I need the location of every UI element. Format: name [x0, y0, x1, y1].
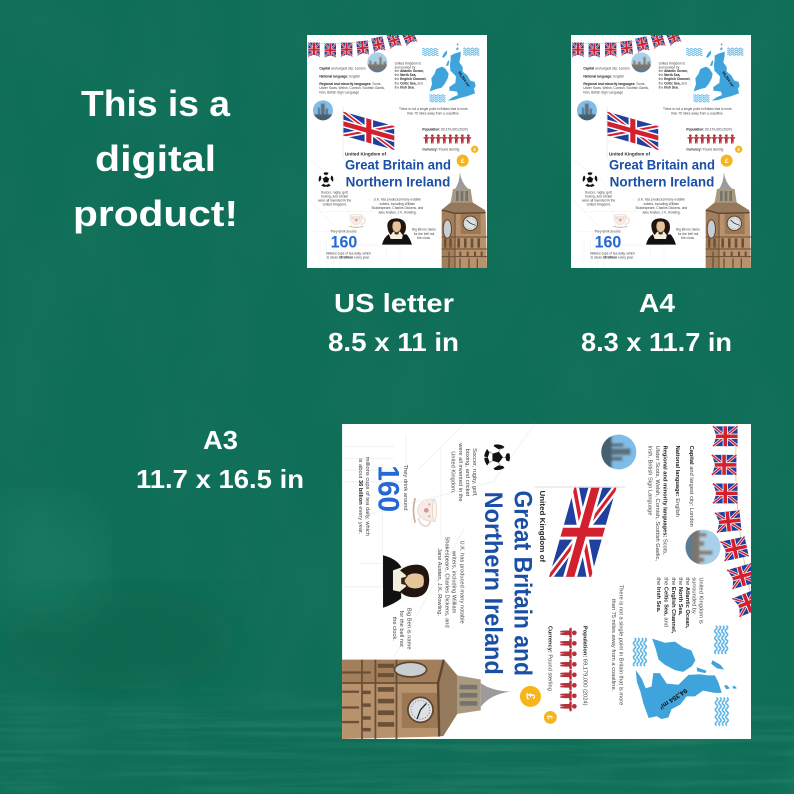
stat: tea	[357, 457, 408, 536]
map of the UK: 94,354 mi²	[721, 71, 735, 89]
illustration: Big Ben	[706, 172, 751, 268]
text: capital and languages: Capital and largest city: London	[319, 67, 366, 71]
text: Big Ben fact	[412, 228, 436, 240]
stat: tea: millions cups of tea daily, which	[364, 457, 370, 536]
map of the UK	[633, 626, 737, 726]
label: US letter size	[328, 288, 459, 357]
text: Big Ben fact: Big Ben is name	[406, 608, 412, 650]
heading: this is a digital product: digital	[95, 138, 216, 179]
text: Big Ben fact: the clock.	[681, 236, 695, 240]
text: Big Ben fact: Big Ben is name	[412, 228, 436, 232]
text: sports	[449, 442, 477, 502]
text: capital and languages	[583, 67, 649, 94]
coins: £	[737, 147, 740, 152]
text: sports: United Kingdom.	[449, 451, 455, 494]
label: US letter size: 8.5 x 11 in	[328, 327, 459, 357]
text: capital and languages: Irish, British Sign Language	[583, 90, 623, 94]
text: capital and languages: Capital and largest city: London	[688, 446, 694, 527]
panel: A4 preview	[571, 28, 751, 268]
text: coastline fact: than 75 miles away from a coastline.	[610, 599, 616, 692]
text: surrounding seas: United Kingdom is	[698, 577, 704, 624]
map of the UK: 94,354 mi²	[658, 687, 688, 710]
label: US letter size: US letter	[334, 288, 454, 318]
illustration: Big Ben	[442, 172, 487, 268]
text: writers: Shakespeare, Charles Dickens, and	[444, 537, 450, 628]
label: A4 size: A4	[639, 288, 676, 318]
union flag	[607, 107, 658, 158]
text: surrounding seas: United Kingdom is	[395, 61, 421, 65]
photo: skyline circle	[576, 99, 598, 121]
text: population and pictogram	[422, 127, 471, 144]
photo: skyline circle	[312, 99, 334, 121]
text: coastline fact: There is not a single point in Britain that is more	[663, 107, 732, 111]
text: surrounding seas	[659, 61, 691, 90]
illustration: Shakespeare	[646, 218, 676, 245]
map of the UK	[686, 43, 743, 102]
text: surrounding seas: the English Channel,	[659, 77, 691, 81]
text: writers: Shakespeare, Charles Dickens, and	[635, 206, 687, 210]
text: surrounding seas: surrounded by	[395, 65, 416, 69]
coins: £	[461, 158, 465, 165]
text: sports: Soccer, rugby, golf,	[585, 190, 613, 194]
text: population and pictogram	[686, 127, 735, 144]
page background	[307, 35, 487, 268]
text: writers: writers, including William	[380, 202, 415, 206]
label: A4 size: 8.3 x 11.7 in	[581, 327, 732, 357]
stat: tea: 160	[371, 465, 403, 512]
text: surrounding seas: the Celtic Sea, and	[662, 577, 668, 627]
text: currency: Currency: Pound sterling	[422, 147, 460, 151]
title: United Kingdom of	[538, 490, 547, 563]
title: Northern Ireland	[610, 174, 714, 190]
stat: tea	[590, 230, 635, 259]
illustration: Shakespeare	[383, 555, 429, 608]
text: writers: U.K. has produced many notable	[458, 540, 464, 624]
text: coastline fact	[610, 585, 623, 705]
text: surrounding seas: the English Channel,	[670, 577, 676, 634]
text: capital and languages	[647, 446, 694, 561]
text: capital and languages: Regional and minority languages: Scots,	[661, 446, 667, 555]
stat: tea: They drink around	[402, 465, 408, 511]
icon: tea cup	[349, 214, 365, 227]
text: sports	[582, 190, 615, 207]
text: capital and languages: National language: English	[674, 446, 680, 517]
photo: city circle	[366, 51, 389, 74]
coins: £	[545, 715, 554, 720]
text: sports: boxing, and cricket	[464, 449, 470, 497]
illustration: Shakespeare	[382, 218, 412, 245]
text: capital and languages: National language: English	[319, 75, 360, 79]
coins: £	[725, 158, 729, 165]
icon: football	[482, 442, 511, 472]
stat: tea: millions cups of tea daily, which	[590, 251, 635, 255]
chalkboard background	[0, 520, 794, 794]
text: Big Ben fact	[676, 228, 700, 240]
text: writers: U.K. has produced many notable	[374, 198, 421, 202]
map of the UK	[422, 43, 479, 102]
text: capital and languages: Irish, British Sign Language	[647, 446, 653, 515]
stat: tea: millions cups of tea daily, which	[326, 251, 371, 255]
bunting	[307, 28, 417, 57]
heading: this is a digital product: product!	[73, 193, 238, 234]
icon: tea cup	[613, 214, 629, 227]
title	[345, 151, 451, 190]
text: capital and languages: Ulster Scots, Welsh, Cornish, Scottish Gaelic,	[319, 86, 385, 90]
text: sports: boxing, and cricket	[321, 194, 348, 198]
label: A3 size: 11.7 x 16.5 in	[136, 464, 304, 494]
text: surrounding seas: surrounded by	[690, 577, 697, 614]
text: surrounding seas: the Atlantic Ocean,	[684, 577, 690, 629]
heading: this is a digital product: This is a	[81, 83, 231, 124]
text: sports: were all invented in the	[318, 198, 351, 202]
photo: skyline circle	[599, 433, 638, 471]
text: writers: Jane Austen, J.K. Rowling.	[378, 210, 417, 214]
title: Great Britain and	[609, 157, 715, 173]
text: surrounding seas: the North Sea,	[659, 73, 680, 77]
stat: tea: is about 36 billion every year.	[591, 255, 634, 259]
text: coastline fact: There is not a single point in Britain that is more	[399, 107, 468, 111]
text: coastline fact: than 75 miles away from a coastline.	[407, 111, 460, 115]
text: writers	[371, 198, 423, 214]
text: writers: Jane Austen, J.K. Rowling.	[436, 548, 442, 616]
text: capital and languages: Capital and largest city: London	[583, 67, 630, 71]
coins	[721, 146, 742, 167]
icon: football	[581, 172, 599, 188]
text: writers: U.K. has produced many notable	[638, 198, 685, 202]
photo: city circle	[630, 51, 653, 74]
text: writers: writers, including William	[451, 550, 457, 614]
text: surrounding seas: the North Sea,	[395, 73, 416, 77]
text: surrounding seas: the Atlantic Ocean,	[395, 69, 424, 73]
text: surrounding seas: the English Channel,	[395, 77, 427, 81]
map of the UK: 94,354 mi²	[457, 71, 471, 89]
text: Big Ben fact: for the bell not	[398, 611, 404, 647]
text: sports: boxing, and cricket	[585, 194, 612, 198]
bunting	[712, 424, 763, 617]
title: Great Britain and	[509, 490, 536, 676]
text: Big Ben fact	[391, 608, 412, 650]
stat: tea	[326, 230, 371, 259]
text: surrounding seas: United Kingdom is	[659, 61, 685, 65]
text: surrounding seas: the Irish Sea.	[659, 86, 679, 90]
text: population and pictogram: Population: 69,179,000 (2024)	[422, 127, 468, 131]
stat: tea: 160	[595, 232, 621, 251]
text: surrounding seas: the Irish Sea.	[395, 86, 415, 90]
panel: A3 preview rotated	[342, 424, 763, 739]
stat: tea: They drink around	[330, 230, 357, 234]
stat: tea: is about 36 billion every year.	[357, 458, 363, 535]
title: United Kingdom of	[609, 151, 651, 156]
text: surrounding seas	[395, 61, 427, 90]
text: capital and languages: National language: English	[583, 75, 624, 79]
heading: this is a digital product	[73, 83, 238, 234]
text: writers: writers, including William	[644, 202, 679, 206]
text: coastline fact	[399, 107, 468, 115]
text: sports: Soccer, rugby, golf,	[471, 448, 477, 497]
text: currency: Currency: Pound sterling	[686, 147, 724, 151]
text: sports	[318, 190, 351, 207]
stat: tea: is about 36 billion every year.	[327, 255, 370, 259]
text: population and pictogram	[560, 626, 588, 711]
text: capital and languages: Irish, British Sign Language	[319, 90, 359, 94]
icon: tea cup	[413, 498, 437, 526]
title: Northern Ireland	[479, 492, 506, 675]
coins	[457, 146, 478, 167]
union flag	[343, 107, 394, 158]
text: Big Ben fact: for the bell not	[678, 232, 698, 236]
text: surrounding seas	[655, 577, 704, 634]
panel: US letter preview	[307, 28, 487, 268]
text: capital and languages: Ulster Scots, Welsh, Cornish, Scottish Gaelic,	[654, 446, 660, 561]
text: writers: Jane Austen, J.K. Rowling.	[642, 210, 681, 214]
coins	[520, 686, 557, 724]
text: writers	[635, 198, 687, 214]
text: coastline fact: than 75 miles away from a coastline.	[671, 111, 724, 115]
photo: city circle	[683, 527, 723, 567]
text: writers	[436, 537, 464, 628]
text: population and pictogram: Population: 69,179,000 (2024)	[686, 127, 732, 131]
label: A3 size: A3	[203, 425, 238, 455]
text: sports: United Kingdom.	[323, 203, 347, 207]
text: Big Ben fact: the clock.	[417, 236, 431, 240]
text: capital and languages	[319, 67, 385, 94]
illustration: Big Ben	[342, 660, 511, 739]
text: Big Ben fact: for the bell not	[414, 232, 434, 236]
text: coastline fact: There is not a single point in Britain that is more	[617, 585, 623, 705]
text: sports: were all invented in the	[457, 442, 463, 502]
text: sports: United Kingdom.	[587, 203, 611, 207]
text: sports: Soccer, rugby, golf,	[321, 190, 349, 194]
text: sports: were all invented in the	[582, 198, 615, 202]
text: capital and languages: Ulster Scots, Welsh, Cornish, Scottish Gaelic,	[583, 86, 649, 90]
text: surrounding seas: the Atlantic Ocean,	[659, 69, 688, 73]
coins: £	[523, 693, 536, 700]
title	[479, 490, 547, 676]
text: surrounding seas: the Irish Sea.	[655, 577, 661, 613]
text: currency: Currency: Pound sterling	[547, 626, 553, 691]
text: Big Ben fact: the clock.	[391, 617, 397, 641]
title	[609, 151, 715, 190]
text: surrounding seas: the Celtic Sea, and	[659, 81, 687, 85]
text: coastline fact	[663, 107, 732, 115]
title: Great Britain and	[345, 157, 451, 173]
text: writers: Shakespeare, Charles Dickens, and	[371, 206, 423, 210]
text: surrounding seas: surrounded by	[659, 65, 680, 69]
text: Big Ben fact: Big Ben is name	[676, 228, 700, 232]
icon: football	[317, 172, 335, 188]
page background	[342, 424, 751, 739]
text: surrounding seas: the North Sea,	[677, 577, 683, 616]
title: United Kingdom of	[345, 151, 387, 156]
text: capital and languages: Regional and minority languages: Scots,	[319, 82, 382, 86]
text: population and pictogram: Population: 69,179,000 (2024)	[582, 626, 588, 706]
page background	[571, 35, 751, 268]
coins: £	[473, 147, 476, 152]
label: A3 size	[136, 425, 304, 494]
union flag	[535, 487, 625, 577]
stat: tea: 160	[331, 232, 357, 251]
bunting	[571, 28, 681, 57]
stat: tea: They drink around	[594, 230, 621, 234]
text: surrounding seas: the Celtic Sea, and	[395, 81, 423, 85]
title: Northern Ireland	[346, 174, 450, 190]
label: A4 size	[581, 288, 732, 357]
text: capital and languages: Regional and minority languages: Scots,	[583, 82, 646, 86]
